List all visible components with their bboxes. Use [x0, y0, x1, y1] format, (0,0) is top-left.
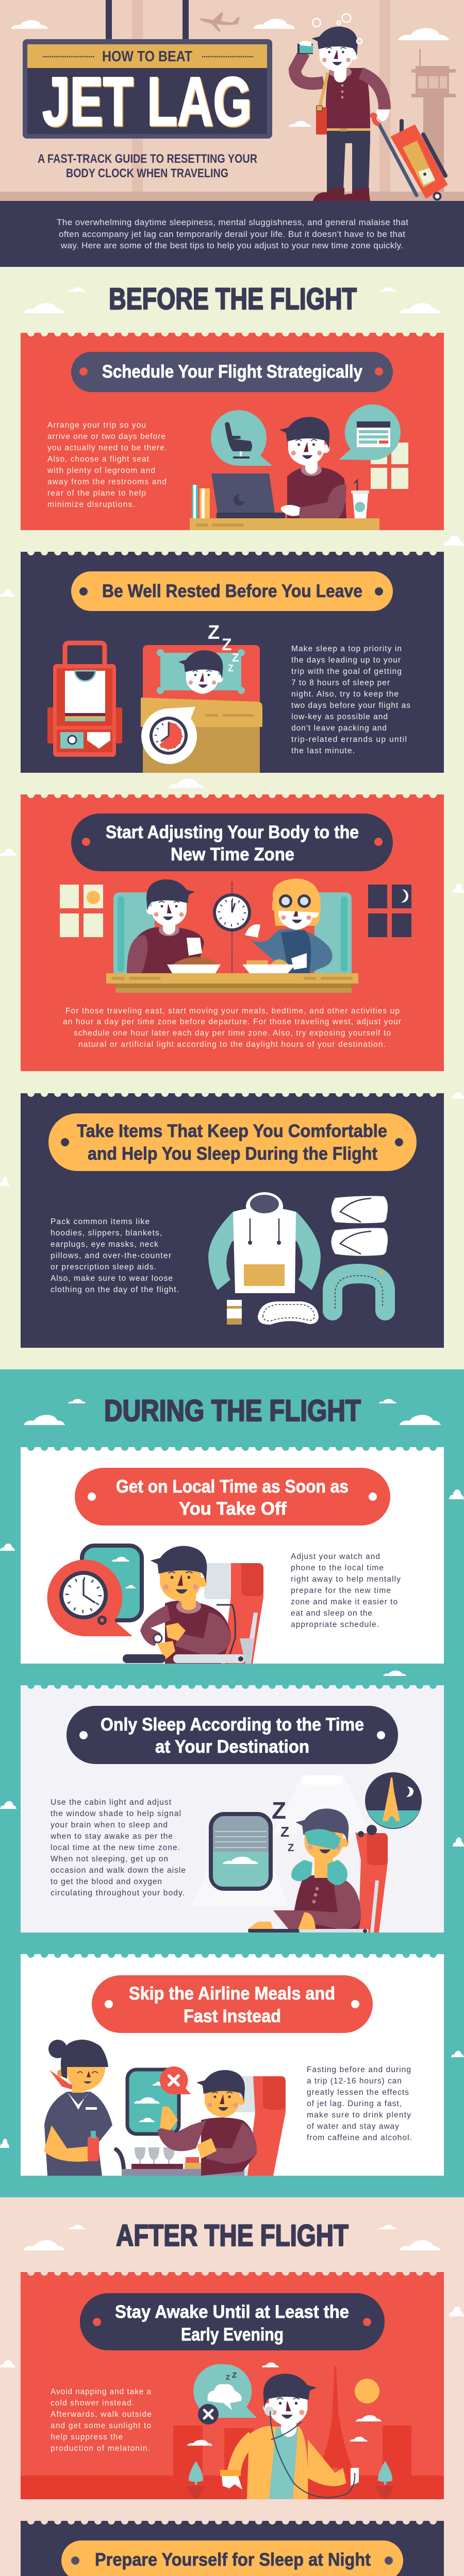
body text: [291, 645, 410, 755]
pill heading: New Time Zone: [171, 844, 294, 865]
illustration: cabin window with shade: [191, 1775, 371, 1906]
illustration: flight attendant: [44, 2040, 112, 2176]
illustration: man with earphones: [0, 2374, 359, 2499]
body text: eat and sleep on the: [291, 1609, 372, 1618]
body text: and get some sunlight to: [51, 2421, 151, 2430]
illustration: man booking flight: [190, 404, 408, 530]
pill heading: Fast Instead: [184, 2006, 281, 2026]
title: jet lag: JET LAG: [42, 63, 252, 140]
pill heading: [80, 2293, 385, 2350]
body text: two days before your flight as: [291, 701, 410, 710]
hero scenery: pillars, floor, clouds, plane, tower: [0, 0, 464, 201]
body text: right away to help mentally: [291, 1575, 401, 1584]
body text: zone and make it easier to: [291, 1598, 397, 1606]
illustration: traveler with suitcase: [295, 14, 446, 201]
body text: away from the restrooms and: [47, 478, 167, 486]
illustration: packed suitcase: [47, 643, 122, 757]
hanging sign: [23, 0, 272, 141]
pill heading: [71, 571, 393, 611]
pill heading: Schedule Your Flight Strategically: [102, 362, 362, 382]
pill heading: Take Items That Keep You Comfortable: [77, 1121, 387, 1141]
illustration: meal cart: [116, 2147, 270, 2176]
body text: Avoid napping and take a: [51, 2387, 151, 2396]
panel: stay awake: [0, 2272, 444, 2499]
body text: don't leave packing and: [291, 724, 387, 733]
panel: skip airline meals: [21, 1954, 444, 2176]
title: jet lag shadow: JET LAG: [43, 64, 253, 141]
pill heading: Prepare Yourself for Sleep at Night: [95, 2550, 371, 2570]
body text: rear of the plane to help: [47, 489, 146, 498]
body text: Use the cabin light and adjust: [51, 1798, 172, 1807]
body text: phone to the local time: [291, 1564, 384, 1572]
pill heading: [67, 1706, 398, 1764]
body text: help suppress the: [51, 2433, 123, 2442]
body text: [50, 1798, 186, 1897]
body text: appropriate schedule.: [291, 1620, 379, 1629]
illustration: thought bubble with brain: Z: [232, 2371, 237, 2380]
clouds: after section: [0, 2225, 464, 2576]
pill heading: Early Evening: [181, 2325, 284, 2345]
body text: 7 to 8 hours of sleep per: [291, 679, 390, 687]
illustration: man sleeping with mask: Z: [288, 1842, 294, 1854]
illustration: sleeping man in bed: Z: [208, 622, 220, 643]
illustration: eye mask: [258, 1301, 319, 1325]
pill heading: [75, 1468, 390, 1526]
body text: Pack common items like: [51, 1217, 150, 1226]
illustration: two diners and clock: [106, 878, 358, 993]
heading: during the flight: DURING THE FLIGHT: [104, 1394, 361, 1428]
body text: [51, 2387, 152, 2453]
body text: Make sleep a top priority in: [291, 645, 402, 653]
intro text: often accompany jet lag can temporarily derail your life. But it doesn't have to be that: [59, 229, 405, 239]
body text: greatly lessen the effects: [307, 2088, 409, 2097]
illustration: man sleeping with mask: Z: [272, 1797, 286, 1824]
pill heading: [61, 2540, 403, 2576]
body text: occasion and walk down the aisle: [51, 1866, 186, 1875]
pill heading: and Help You Sleep During the Flight: [88, 1144, 377, 1164]
body text: [51, 1217, 179, 1294]
body text: prepare for the new time: [291, 1586, 391, 1595]
body text: earplugs, eye masks, neck: [51, 1240, 158, 1249]
illustration: hoodie: [208, 1192, 321, 1293]
body text: or prescription sleep aids.: [51, 1263, 156, 1272]
body text: circulating throughout your body.: [51, 1889, 185, 1897]
section background: hero: [0, 0, 464, 201]
body text: night. Also, try to keep the: [291, 690, 399, 699]
illustration: sleeping man in bed: Z: [232, 651, 239, 664]
body text: natural or artificial light according to the daylight hours of your destination.: [78, 1040, 386, 1049]
body text: Arrange your trip so you: [47, 421, 146, 430]
subtitle: A FAST-TRACK GUIDE TO RESETTING YOUR: [38, 152, 257, 166]
intro text: way. Here are some of the best tips to help you adjust to your new time zone quickly.: [60, 241, 403, 250]
illustration: man sleeping with mask: Z: [280, 1824, 289, 1840]
illustration: city, sun and Eiffel tower: [21, 2363, 444, 2499]
illustration: sleeping man in bed: [141, 622, 262, 773]
illustration: thought bubble with brain: Z: [226, 2374, 230, 2381]
pill heading: [71, 352, 393, 392]
pill heading: Get on Local Time as Soon as: [116, 1477, 349, 1497]
pill heading: Only Sleep According to the Time: [101, 1715, 364, 1735]
illustration: sleeping man in bed: Z: [222, 635, 232, 654]
body text: trip-related errands up until: [291, 735, 407, 744]
body text: with plenty of legroom and: [47, 466, 155, 475]
pill heading: [92, 1975, 373, 2033]
heading: before the flight: BEFORE THE FLIGHT: [109, 282, 357, 316]
illustration: thought bubble with brain: [193, 2364, 257, 2425]
pill heading: Start Adjusting Your Body to the: [106, 822, 359, 842]
section background: before the flight: [0, 267, 464, 1369]
body text: [307, 2065, 412, 2142]
pill heading: Be Well Rested Before You Leave: [102, 581, 362, 601]
body text: of water and stay away: [307, 2122, 399, 2131]
body text: [47, 421, 167, 509]
body text: pillows, and over-the-counter: [51, 1251, 171, 1260]
clouds: during section: [0, 1399, 464, 2148]
body text: arrive one or two days before: [47, 432, 165, 441]
body text: Fasting before and during: [307, 2065, 411, 2074]
body text: low-key as possible and: [291, 713, 388, 721]
panel: get on local time: [21, 1447, 444, 1664]
illustration: window with refusal bubble: [127, 2066, 191, 2134]
body text: Afterwards, walk outside: [51, 2410, 152, 2419]
body text: you actually need to be there.: [47, 444, 167, 452]
panel: schedule your flight: [21, 333, 444, 530]
body text: minimize disruptions.: [47, 500, 135, 509]
body text: local time at the new time zone.: [51, 1843, 180, 1852]
body text: Also, make sure to wear loose: [51, 1274, 173, 1283]
body text: production of melatonin.: [51, 2444, 150, 2453]
body text: clothing on the day of the flight.: [51, 1285, 179, 1294]
panel: items that keep you comfortable: [21, 1093, 444, 1348]
pill heading: Stay Awake Until at Least the: [115, 2302, 349, 2322]
illustration: slippers: [331, 1196, 388, 1256]
body text: make sure to drink plenty: [307, 2111, 411, 2120]
heading: after the flight: AFTER THE FLIGHT: [116, 2219, 349, 2252]
pill heading: [71, 814, 393, 871]
body text: Adjust your watch and: [291, 1552, 380, 1561]
panel: prepare yourself for sleep: [21, 2521, 444, 2576]
pill heading: You Take Off: [179, 1499, 287, 1519]
subtitle: [38, 152, 257, 180]
illustration: pill bottle: [227, 1300, 242, 1325]
body text: from caffeine and alcohol.: [307, 2133, 412, 2142]
pill heading: [48, 1113, 417, 1171]
body text: When not sleeping, get up on: [51, 1855, 168, 1863]
intro text: The overwhelming daytime sleepiness, mental sluggishness, and general malaise that: [57, 217, 408, 227]
body text: Also, choose a flight seat: [47, 455, 150, 464]
pill heading: at Your Destination: [155, 1737, 309, 1757]
body text: your brain when to sleep and: [51, 1821, 168, 1829]
intro band: [0, 201, 464, 267]
body text: the window shade to help signal: [51, 1809, 181, 1818]
title: how to beat: HOW TO BEAT: [102, 48, 192, 65]
illustration: man checking watch in seat: [123, 1546, 263, 1664]
illustration: neck pillow: [333, 1270, 385, 1311]
body text: schedule one hour later each day per time zone. Also, try exposing yourself to: [74, 1029, 391, 1038]
body text: cold shower instead.: [51, 2399, 134, 2408]
illustration: Eiffel tower circle: [365, 1772, 422, 1829]
body text: hoodies, slippers, blankets,: [51, 1229, 162, 1238]
body text: a trip (12-16 hours) can: [307, 2077, 402, 2086]
pill heading: Skip the Airline Meals and: [129, 1984, 335, 2004]
body text: to get the blood and oxygen: [51, 1877, 162, 1886]
panel: be well rested: [21, 552, 444, 773]
intro text: [57, 217, 408, 250]
body text: trip with the goal of getting: [291, 667, 402, 676]
illustration: nighttime window: [368, 885, 411, 937]
subtitle: BODY CLOCK WHEN TRAVELING: [66, 166, 228, 180]
section background: after the flight: [0, 2197, 464, 2576]
illustration: sleeping man in bed: Z: [228, 663, 234, 673]
body text: the last minute.: [291, 747, 355, 755]
section background: during the flight: [0, 1369, 464, 2197]
body text: [63, 1007, 401, 1049]
body text: [291, 1552, 401, 1629]
illustration: man sleeping with mask: [247, 1797, 388, 1933]
body text: an hour a day per time zone before departure. For those traveling west, adjust your: [63, 1018, 401, 1026]
body text: For those traveling east, start moving your meals, bedtime, and other activities up: [65, 1007, 400, 1015]
panel: start adjusting: [21, 794, 444, 1071]
body text: the days leading up to your: [291, 656, 401, 665]
body text: when to stay awake as per the: [50, 1832, 173, 1841]
illustration: man refusing meal: [157, 2070, 286, 2176]
body text: of jet lag. During a fast,: [307, 2099, 402, 2108]
panel: only sleep according to time: [21, 1685, 444, 1933]
illustration: daytime window: [60, 885, 103, 937]
clouds: before section: [0, 287, 464, 1186]
illustration: clock bubble and window: [47, 1546, 142, 1636]
